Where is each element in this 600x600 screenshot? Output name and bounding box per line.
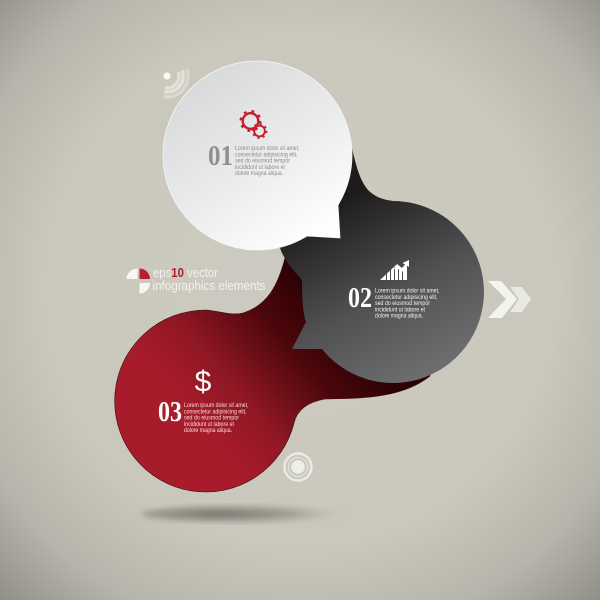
text block 03: sed do eiusmod tempor [184,416,239,422]
dark speech blob [250,120,484,383]
text block 03: Lorem ipsum dolor sit amet, [184,403,249,409]
text block 01: consectetur adipisicing elit, [235,152,298,158]
text block 02: Lorem ipsum dolor sit amet, [375,289,440,295]
text block 02: incididunt ut labore et [375,307,425,313]
number 03: 03 [158,397,182,428]
heading: infographics elements: infographics elements [152,278,266,293]
icon: dollar sign: $ [195,366,212,398]
icon: wifi signal [163,69,188,97]
text block 02: sed do eiusmod tempor [375,301,430,307]
text block 01: dolore magna aliqua. [235,171,283,177]
icon: concentric rings [284,454,312,480]
ground shadow [141,505,345,523]
icon: growth chart [380,260,409,280]
heading: eps10 vector: eps10 vector [153,265,219,280]
number 01: 01 [208,141,233,172]
text block 03: incididunt ut labore et [184,422,234,428]
white speech bubble [163,61,352,250]
text block 01: Lorem ipsum dolor sit amet, [235,146,300,152]
icon: gears [241,111,266,138]
icon: quartered pie [126,268,150,294]
text block 01 [235,146,300,177]
text block 03 [184,403,249,434]
text block 02 [375,289,440,320]
text block 02: consectetur adipisicing elit, [375,295,438,301]
text block 01: incididunt ut labore et [235,165,285,171]
icon: chevron arrows [488,281,531,318]
text block 01: sed do eiusmod tempor [235,159,290,165]
text block 03: consectetur adipisicing elit, [184,410,247,416]
text block 02: dolore magna aliqua. [375,314,423,320]
text block 03: dolore magna aliqua. [184,428,232,434]
red speech blob [115,258,430,492]
number 02: 02 [348,283,372,314]
